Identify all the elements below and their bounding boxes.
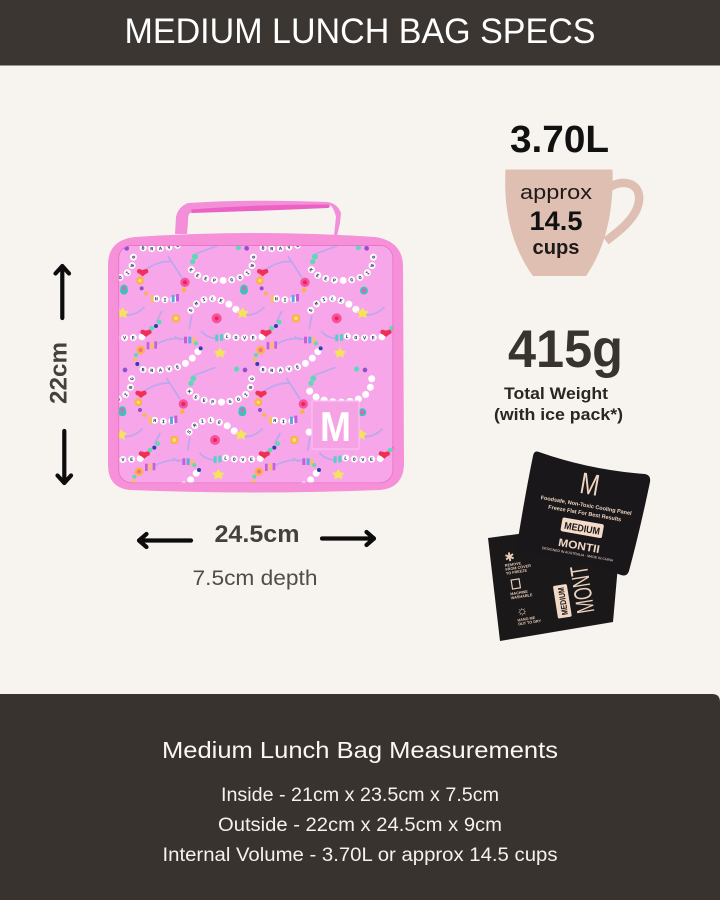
height arrow: down xyxy=(58,431,71,483)
bag print: friendship bracelets: HI xyxy=(275,297,286,302)
depth label: 7.5cm depth xyxy=(192,567,318,590)
volume value: 3.70L xyxy=(510,119,609,161)
inside measurements: Inside - 21cm x 23.5cm x 7.5cm xyxy=(221,785,499,806)
height arrow: up xyxy=(56,266,69,318)
bag print: friendship bracelets xyxy=(118,245,394,484)
internal volume: Internal Volume - 3.70L or approx 14.5 cups xyxy=(162,845,558,866)
bag print: friendship bracelets: SMILE xyxy=(187,418,222,434)
ice pack: back sleeve: WASHABLE xyxy=(511,593,533,600)
bag handle xyxy=(175,201,341,236)
ice pack: front pouch: DESIGNED IN AUSTRALIA · MADE IN CHINA xyxy=(542,546,614,563)
bag print: friendship bracelets: LOVE xyxy=(344,456,373,462)
weight caption: (with ice pack*) xyxy=(494,406,623,424)
bag print: friendship bracelets: KEEP GOING xyxy=(189,256,256,282)
weight caption xyxy=(494,385,623,424)
weight value: 415g xyxy=(508,320,623,379)
bag print: friendship bracelets: LOVE xyxy=(123,336,135,340)
bag logo patch: M xyxy=(320,403,351,450)
bag print: friendship bracelets: LOVE xyxy=(346,334,375,340)
outside measurements: Outside - 22cm x 24.5cm x 9cm xyxy=(218,815,502,836)
height label: 22cm xyxy=(46,342,72,404)
ice pack: front pouch: MONTII xyxy=(557,537,601,556)
bag print: friendship bracelets: SMILE xyxy=(308,296,343,312)
bag print: friendship bracelets: KEEP GOING xyxy=(119,256,136,280)
ice pack: front pouch xyxy=(516,452,650,576)
bag print: friendship bracelets: SMILE xyxy=(68,296,109,314)
ice pack: back sleeve: TO FREEZE xyxy=(506,568,528,576)
ice pack: front pouch: Freeze Flat For Best Results xyxy=(548,505,622,523)
bag body xyxy=(108,233,404,492)
bag print: friendship bracelets: KEEP GOING xyxy=(188,378,254,404)
ice pack: back sleeve: OUT TO DRY xyxy=(518,619,542,627)
bag print: friendship bracelets: LOVE xyxy=(224,456,253,462)
bag print: friendship bracelets: LOVE xyxy=(122,458,133,462)
bag print: friendship bracelets: BRAVE xyxy=(142,365,180,372)
ice pack: back sleeve: REMOVE xyxy=(505,561,522,568)
ice pack: back sleeve: ☼ xyxy=(515,602,529,619)
ice pack: back sleeve xyxy=(488,520,622,641)
bag print: friendship bracelets: SMILE xyxy=(188,296,223,312)
bag print: friendship bracelets: KEEP GOING xyxy=(309,256,376,282)
ice pack: back sleeve: MACHINE xyxy=(510,590,529,596)
ice pack: front pouch: M xyxy=(578,467,602,503)
ice pack: front pouch: Foodsafe, Non-Toxic Cooling Panel xyxy=(540,495,632,517)
measurements panel xyxy=(0,694,720,900)
bag print: friendship bracelets: KEEP GOING xyxy=(118,378,134,401)
icon: mug with cups label xyxy=(505,170,639,276)
title bar: MEDIUM LUNCH BAG SPECS xyxy=(124,12,596,51)
icon: mug with cups label: cups xyxy=(532,237,580,259)
ice pack: back sleeve: MONT xyxy=(565,564,600,615)
bag print: friendship bracelets: HI xyxy=(273,418,284,424)
icon: mug with cups label: 14.5 xyxy=(530,206,582,236)
bag print: friendship bracelets: HI xyxy=(155,297,166,302)
title bar xyxy=(0,0,720,66)
width label: 24.5cm xyxy=(214,521,300,548)
bag print: friendship bracelets: BRAVE xyxy=(262,246,300,250)
ice pack: back sleeve: FROM COVER xyxy=(505,564,531,572)
bag print: friendship bracelets: BRAVE xyxy=(262,365,300,372)
bag print: friendship bracelets: LOVE xyxy=(226,334,255,340)
width arrow: left xyxy=(139,534,191,547)
ice pack: back sleeve: HANG ME xyxy=(517,616,536,623)
ice pack: front pouch: MEDIUM xyxy=(563,521,601,538)
icon: mug with cups label: approx xyxy=(520,182,592,204)
panel heading: Medium Lunch Bag Measurements xyxy=(162,737,558,763)
bag print: friendship bracelets: BRAVE xyxy=(142,246,180,250)
ice pack: back sleeve: ✱ xyxy=(503,549,516,565)
weight caption: Total Weight xyxy=(504,385,609,403)
ice pack: back sleeve: MEDIUM xyxy=(556,587,570,616)
width arrow: right xyxy=(322,532,374,545)
bag print: friendship bracelets: HI xyxy=(153,418,164,424)
lunch bag illustration xyxy=(108,200,404,492)
